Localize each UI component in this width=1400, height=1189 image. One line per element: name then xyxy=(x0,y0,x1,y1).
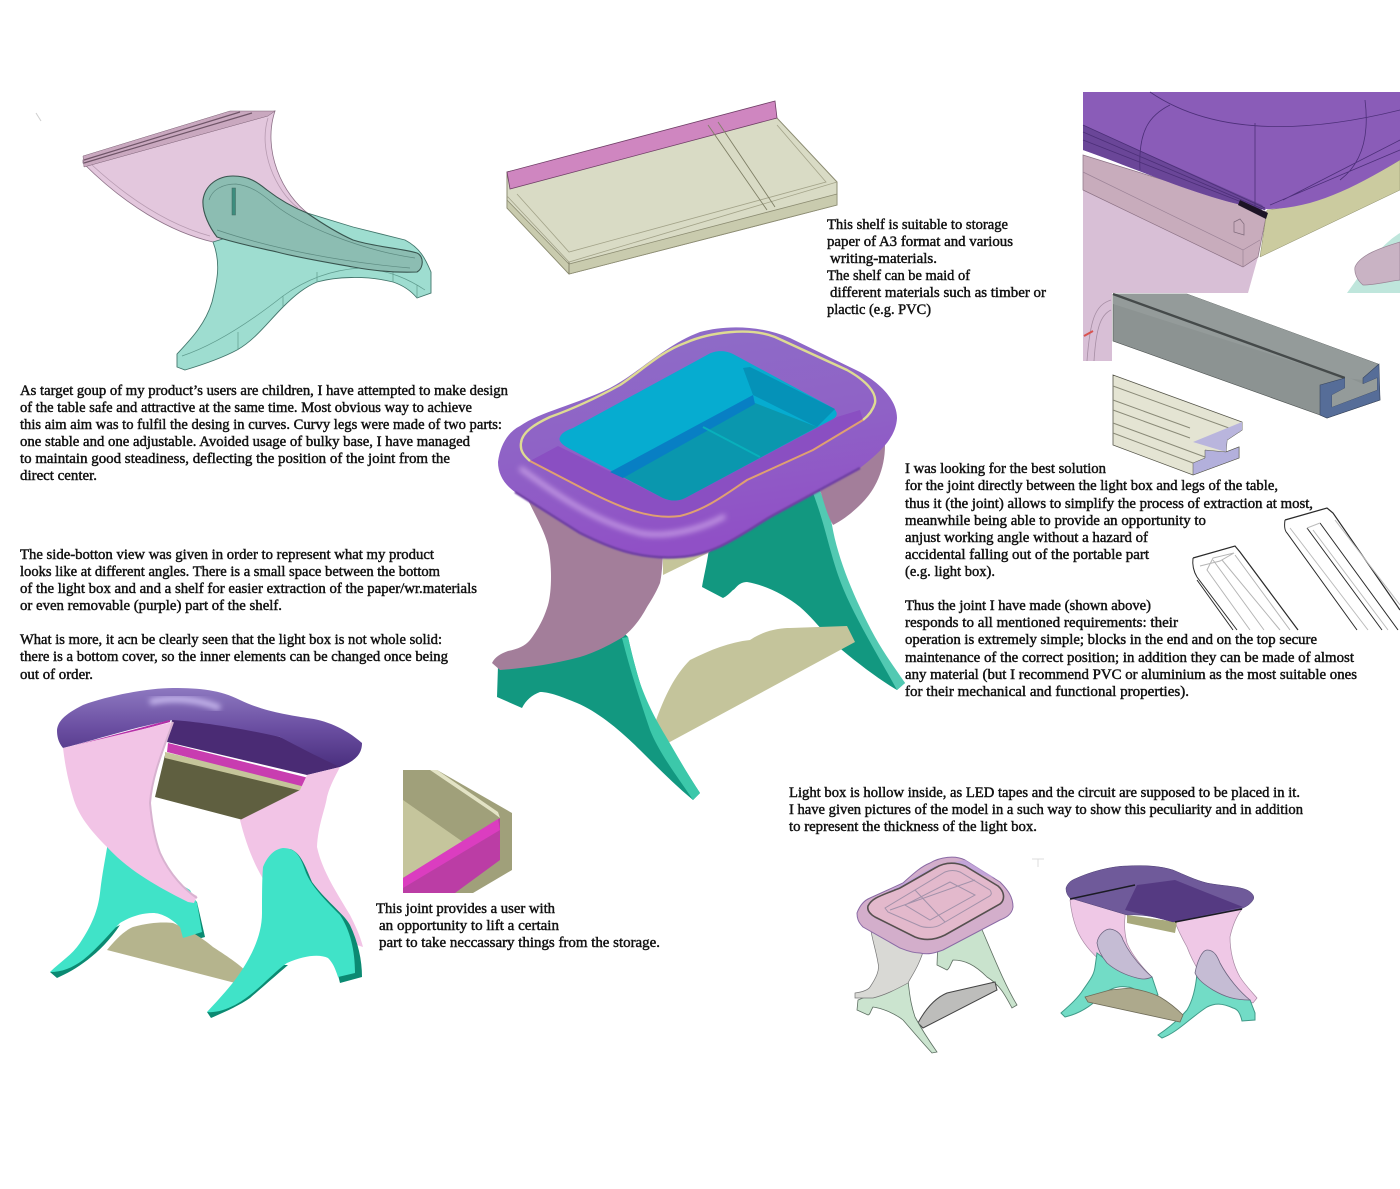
wire shelf xyxy=(918,982,997,1028)
right teal leg side xyxy=(207,849,362,1018)
dark underside panel xyxy=(1125,880,1243,922)
overlapping teardrop xyxy=(203,176,422,272)
rail stripes xyxy=(84,112,252,163)
left teal leg xyxy=(50,840,202,972)
teal left leg xyxy=(1061,953,1158,1017)
translucent lower shelf xyxy=(1085,988,1183,1022)
illustration: underside view of table xyxy=(50,688,363,1018)
shelf base xyxy=(507,118,837,274)
wire dark ring xyxy=(868,863,1004,939)
orange ring front xyxy=(530,420,863,517)
illustration: main table xyxy=(492,327,905,800)
purple top xyxy=(1083,92,1400,209)
beige body xyxy=(1113,375,1242,475)
illustration: translucent leg assembly xyxy=(83,111,431,370)
design intro paragraph: to maintain good steadiness, deflecting the position of the joint from the xyxy=(20,451,450,467)
dark joint slot xyxy=(1238,200,1268,219)
side-bottom view paragraph xyxy=(20,547,477,683)
light box paragraph: to represent the thickness of the light box. xyxy=(789,819,1037,835)
shelf inner rim lines xyxy=(507,125,837,262)
joint caption: part to take neccassary things from the storage. xyxy=(379,935,660,951)
joint explanation paragraph: thus it (the joint) allows to simplify the process of extraction at most, xyxy=(905,496,1313,512)
small pink foot xyxy=(1355,242,1400,285)
upper shelf strip xyxy=(663,530,735,575)
joint requirements paragraph: any material (but I recommend PVC or aluminium as the most suitable ones xyxy=(905,667,1357,683)
lavender end upper xyxy=(1193,422,1242,452)
wire top rim xyxy=(857,857,1013,954)
purple top rim xyxy=(57,688,362,767)
pink leg close-up xyxy=(1083,190,1258,361)
joint explanation paragraph: accidental falling out of the portable part xyxy=(905,547,1149,563)
translucent purple top xyxy=(1066,866,1254,922)
magenta strip xyxy=(167,743,325,792)
shelf olive xyxy=(1127,915,1177,933)
wire grey pink leg xyxy=(855,925,925,998)
shelf blue strip xyxy=(610,395,755,478)
lower beige shelf xyxy=(107,922,248,985)
joint requirements paragraph xyxy=(905,598,1357,700)
left pink leg xyxy=(63,722,197,903)
joint explanation paragraph: I was looking for the best solution xyxy=(905,461,1107,477)
joint housing xyxy=(403,770,512,893)
shelf front thickness xyxy=(507,194,837,274)
wire front leg xyxy=(857,980,937,1053)
shelf back wall xyxy=(743,367,835,427)
joint floor xyxy=(403,800,463,878)
front leg light edge xyxy=(622,637,700,800)
side-bottom view paragraph: out of order. xyxy=(20,667,93,683)
translucent pink left leg xyxy=(1070,885,1152,979)
shelf floor xyxy=(623,403,817,501)
illustration: corner close-up of translucent joint xyxy=(1083,92,1400,361)
wire inner rectangle xyxy=(885,870,991,927)
rail body xyxy=(1113,294,1380,418)
shelf lip xyxy=(165,752,327,797)
teardrop inner contour xyxy=(209,184,415,268)
bright magenta edge xyxy=(403,819,500,888)
front teal leg xyxy=(497,632,700,800)
teal leg inner edge xyxy=(182,268,425,356)
light box paragraph: I have given pictures of the model in a such way to show this peculiarity and in addition xyxy=(789,802,1304,818)
joint explanation paragraph: (e.g. light box). xyxy=(905,564,995,580)
illustration: shelf xyxy=(507,101,837,274)
wireframe contours xyxy=(1083,92,1400,210)
joint explanation paragraph: anjust working angle without a hazard of xyxy=(905,530,1148,546)
shelf dividers xyxy=(569,122,775,274)
wire top sheen xyxy=(878,860,995,897)
joint requirements paragraph: for their mechanical and functional properties). xyxy=(905,684,1189,700)
shelf description: different materials such as timber or xyxy=(830,285,1046,301)
yellow ring back xyxy=(521,332,875,461)
side-bottom view paragraph: of the light box and and a shelf for easier extraction of the paper/wr.materials xyxy=(20,581,477,597)
rail top face xyxy=(1113,294,1378,380)
light box paragraph xyxy=(789,785,1304,835)
wireframe block one xyxy=(1193,546,1298,630)
design intro paragraph: this aim aim was to fulfil the desing in curves. Curvy legs were made of two parts: xyxy=(20,417,502,433)
front pink leg xyxy=(492,500,663,670)
joint caption xyxy=(376,901,660,951)
wire back leg xyxy=(937,925,1017,1008)
illustration: wireframe table top view xyxy=(855,857,1017,1053)
rim sheen xyxy=(150,699,220,708)
illustration: wireframe joint blocks xyxy=(1193,508,1400,630)
teardrop pin xyxy=(232,188,236,215)
joint requirements paragraph: Thus the joint I have made (shown above) xyxy=(905,598,1151,614)
left teal leg side xyxy=(50,895,205,978)
rim highlight xyxy=(520,468,725,534)
side-bottom view paragraph: The side-botton view was given in order to represent what my product xyxy=(20,547,434,563)
pink leg edge xyxy=(150,722,197,898)
illustration: joint close-up xyxy=(403,770,512,893)
cyan light box opening xyxy=(560,351,837,501)
shelf description: This shelf is suitable to storage xyxy=(827,217,1008,233)
red axis tick xyxy=(1084,331,1093,336)
translucent pink right leg xyxy=(1175,909,1257,1003)
back leg light edge xyxy=(813,491,905,690)
right pink leg xyxy=(240,767,363,947)
wireframe block two xyxy=(1285,508,1400,630)
back teal leg xyxy=(702,490,905,690)
joint requirements paragraph: responds to all mentioned requirements: their xyxy=(905,615,1178,631)
black leg top edges xyxy=(1070,885,1242,922)
small joint outline xyxy=(1234,219,1244,235)
shelf description xyxy=(827,217,1046,318)
pink leg inner contour xyxy=(92,118,298,236)
shelf description: The shelf can be maid of xyxy=(827,268,970,284)
shelf description: plactic (e.g. PVC) xyxy=(827,302,931,318)
magenta strip xyxy=(403,818,500,893)
purple shadow band xyxy=(1083,125,1266,210)
stray T mark xyxy=(1032,859,1044,867)
illustration: translucent table underside xyxy=(1061,866,1257,1038)
shelf divider xyxy=(703,427,760,457)
design intro paragraph: one stable and one adjustable. Avoided usage of bulky base, I have managed xyxy=(20,434,471,450)
teal corner xyxy=(1347,233,1400,293)
dark underside of top xyxy=(167,716,340,775)
lower pink contour xyxy=(1087,300,1111,361)
pink upper leg xyxy=(83,111,310,250)
rail slot line xyxy=(1113,294,1345,378)
design intro paragraph xyxy=(20,383,509,484)
olive side rail xyxy=(1260,160,1400,257)
translucent teardrop right xyxy=(1195,950,1250,1000)
joint lip highlight xyxy=(430,770,500,818)
lower beige shelf xyxy=(655,626,855,743)
illustration: beige rail profile xyxy=(1113,375,1242,475)
translucent teardrop left xyxy=(1097,929,1152,979)
rim lower shade xyxy=(515,468,860,557)
side-bottom view paragraph: What is more, it acn be clearly seen that the light box is not whole solid: xyxy=(20,632,442,648)
back pink leg xyxy=(820,445,885,525)
shelf pink back strip xyxy=(507,101,777,189)
rail inner line xyxy=(1083,172,1260,267)
magenta trim xyxy=(76,721,170,746)
side-bottom view paragraph: or even removable (purple) part of the shelf. xyxy=(20,598,282,614)
joint explanation paragraph: for the joint directly between the light box and legs of the table, xyxy=(905,478,1278,494)
mauve rail xyxy=(1083,155,1267,267)
right teal leg xyxy=(207,848,355,1012)
rail slot floor xyxy=(1332,376,1377,407)
design intro paragraph: As target goup of my product’s users are children, I have attempted to make design xyxy=(20,383,509,399)
joint explanation paragraph xyxy=(905,461,1313,580)
beige inner grooves xyxy=(1113,386,1240,463)
tiny stray mark top left xyxy=(36,113,41,121)
joint caption: an opportunity to lift a certain xyxy=(379,918,560,934)
light box paragraph: Light box is hollow inside, as LED tapes and the circuit are supposed to be placed in it. xyxy=(789,785,1300,801)
olive shelf underside xyxy=(155,755,327,820)
joint caption: This joint provides a user with xyxy=(376,901,556,917)
shelf description: paper of A3 format and various xyxy=(827,234,1013,250)
rail end face xyxy=(1320,364,1380,418)
joint requirements paragraph: maintenance of the correct position; in addition they can be made of almost xyxy=(905,650,1354,666)
shelf description: writing-materials. xyxy=(830,251,937,267)
design intro paragraph: of the table safe and attractive at the same time. Most obvious way to achieve xyxy=(20,400,472,416)
teal right leg xyxy=(1158,973,1255,1038)
side-bottom view paragraph: looks like at different angles. There is a small space between the bottom xyxy=(20,564,441,580)
side-bottom view paragraph: there is a bottom cover, so the inner elements can be changed once being xyxy=(20,649,448,665)
illustration: grey rail profile xyxy=(1113,294,1380,418)
flat purple band xyxy=(530,410,863,517)
joint explanation paragraph: meanwhile being able to provide an opportunity to xyxy=(905,513,1206,529)
table top rim xyxy=(498,327,897,557)
pink leg top rail xyxy=(83,111,275,167)
joint requirements paragraph: operation is extremely simple; blocks in the end and on the top secure xyxy=(905,632,1317,648)
lavender end lower xyxy=(1193,447,1239,475)
design intro paragraph: direct center. xyxy=(20,468,97,484)
teal lower leg xyxy=(177,213,431,370)
